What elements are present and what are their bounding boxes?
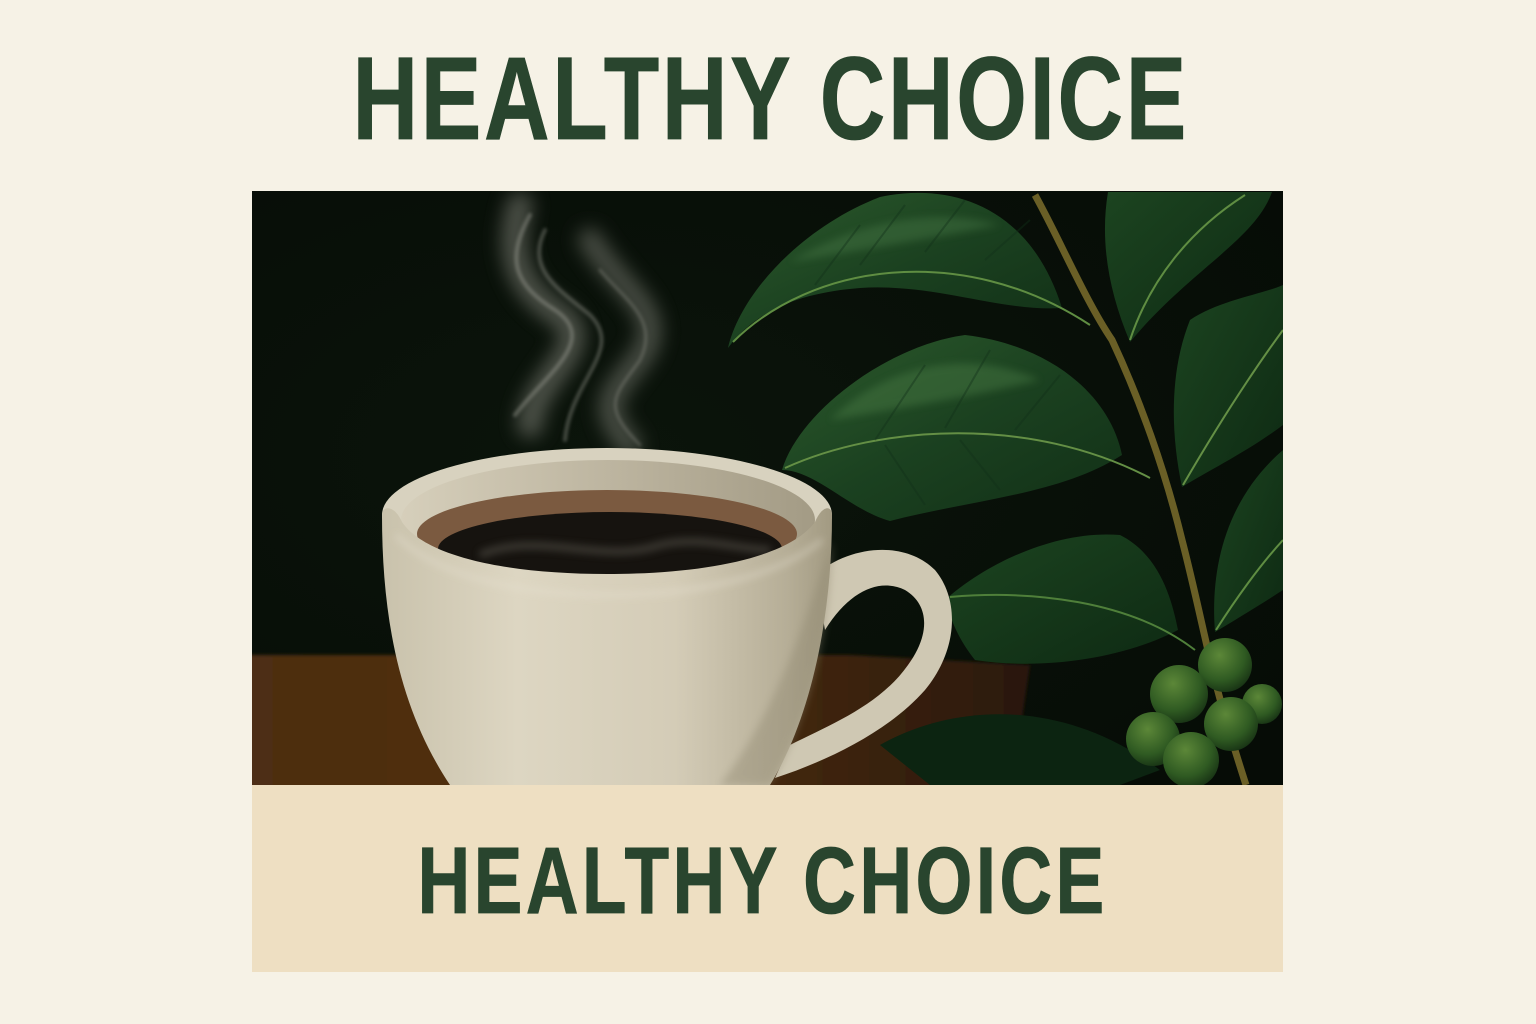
leaf: bottom shadow (880, 714, 1160, 785)
leaf: top center (728, 193, 1090, 348)
crema (417, 490, 797, 549)
cup shading (720, 540, 832, 785)
steam (514, 205, 650, 445)
photo: coffee cup and coffee plant (240, 191, 1283, 800)
caption text: HEALTHY CHOICE (418, 827, 1104, 933)
cup rim back (382, 448, 832, 522)
photo background (252, 191, 1283, 785)
wooden table (252, 653, 1030, 785)
leaf: top right (1105, 192, 1272, 342)
berries (1126, 638, 1282, 788)
coffee sheen (480, 542, 770, 555)
plant stem (1035, 195, 1246, 785)
caption band (252, 785, 1283, 972)
coffee surface (438, 512, 782, 574)
leaf: middle (782, 335, 1150, 521)
leaf: lower right (1214, 450, 1283, 632)
coffee plant (728, 192, 1283, 788)
lip highlight (717, 539, 822, 586)
coffee cup (382, 448, 952, 785)
leaf: right (1174, 285, 1283, 487)
title: HEALTHY CHOICE (352, 34, 1186, 165)
cup body (382, 508, 832, 785)
inner cup wall (433, 460, 815, 540)
cup handle (775, 550, 952, 778)
leaf: lower (945, 534, 1195, 664)
